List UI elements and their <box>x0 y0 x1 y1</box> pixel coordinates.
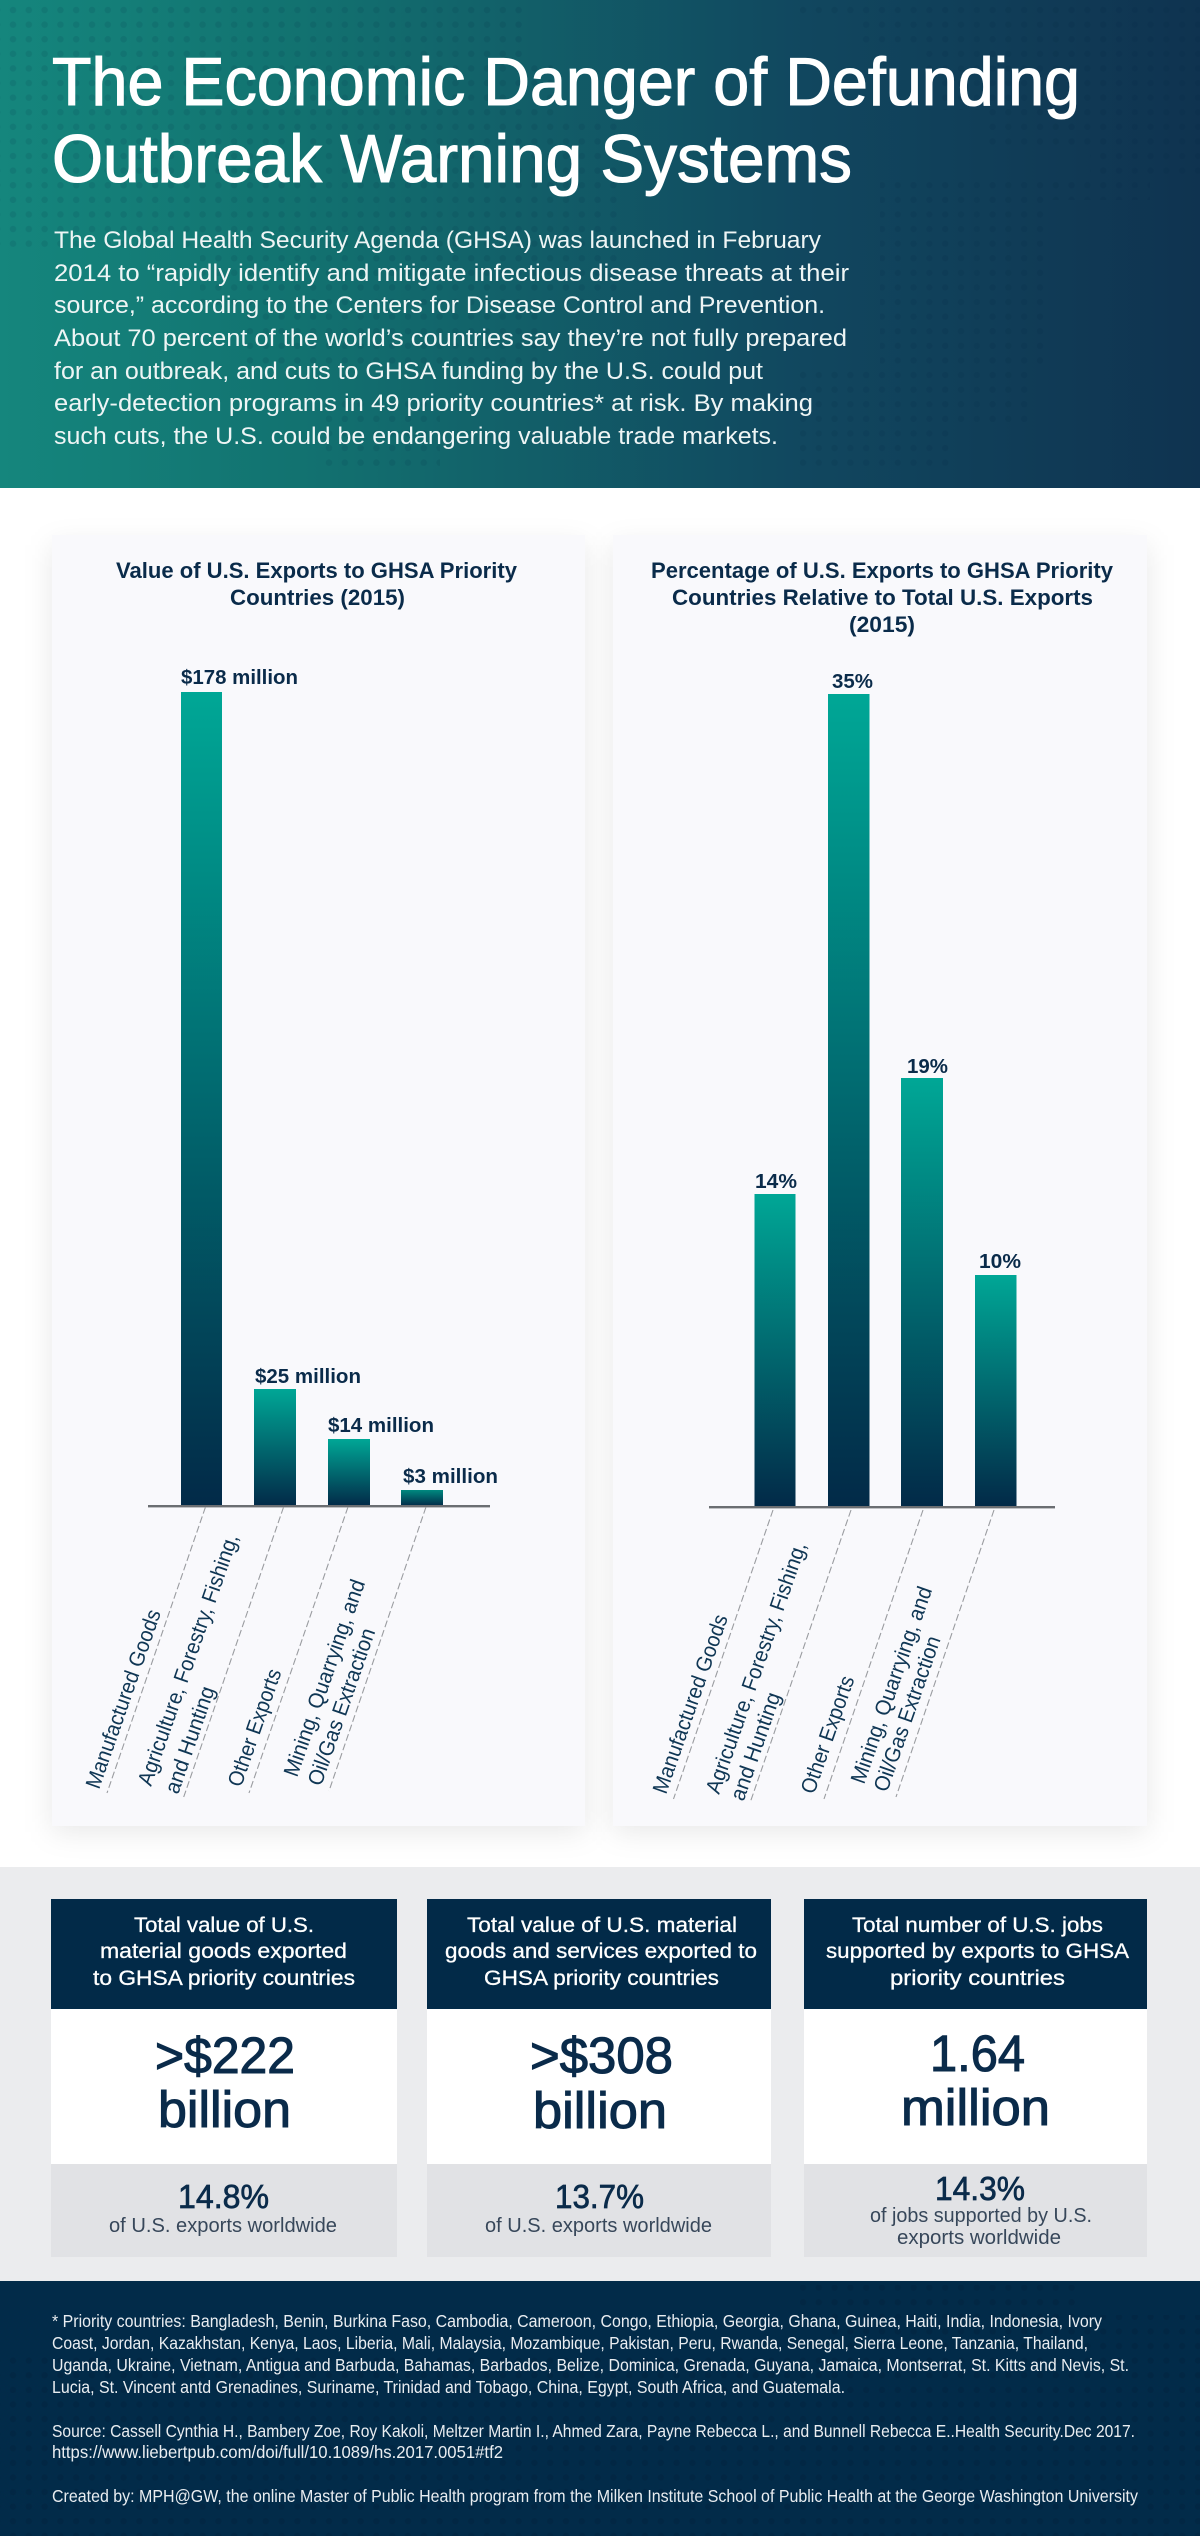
panel: percentage of exports <box>613 535 1147 1832</box>
big number: million <box>901 2079 1050 2136</box>
intro paragraph: The Global Health Security Agenda (GHSA) was launched in February <box>54 227 821 254</box>
card heading: Total number of U.S. jobs <box>852 1913 1103 1937</box>
category labels: Agriculture, Forestry, Fishing, <box>133 1531 243 1789</box>
bar: manufactured goods 14% <box>754 1170 797 1506</box>
bar: other exports 19% <box>901 1055 948 1506</box>
panel heading: (2015) <box>849 612 915 637</box>
card heading: goods and services exported to <box>445 1939 757 1963</box>
bar: mining 10% <box>975 1250 1021 1506</box>
big number: billion <box>158 2081 291 2138</box>
title: Outbreak Warning Systems <box>52 121 852 197</box>
share of jobs: 14.3% <box>935 2171 1025 2208</box>
category labels: Mining, Quarrying, and <box>279 1576 370 1780</box>
category leader lines <box>107 1507 426 1797</box>
bar: manufactured goods <box>181 666 298 1506</box>
intro paragraph: such cuts, the U.S. could be endangering valuable trade markets. <box>54 423 778 450</box>
card heading: Total value of U.S. <box>134 1913 314 1937</box>
bar: agriculture <box>254 1365 361 1506</box>
footnote: priority countries <box>52 2311 1129 2397</box>
intro paragraph: source,” according to the Centers for Disease Control and Prevention. <box>54 292 825 319</box>
share of exports <box>109 2179 337 2237</box>
bar: other exports: $14 million <box>328 1414 434 1437</box>
category labels: Other Exports <box>223 1666 286 1790</box>
category labels: Manufactured Goods <box>81 1606 166 1792</box>
card heading <box>445 1913 757 1990</box>
panel heading: Percentage of U.S. Exports to GHSA Priority <box>651 558 1113 583</box>
card heading: GHSA priority countries <box>484 1966 719 1990</box>
category labels: and Hunting <box>160 1683 220 1797</box>
share of exports: of U.S. exports worldwide <box>109 2215 337 2237</box>
bar: mining: $3 million <box>403 1465 498 1488</box>
category labels: Oil/Gas Extraction <box>869 1633 946 1795</box>
bar: agriculture 35% <box>828 670 873 1506</box>
stat card: material goods <box>51 1899 397 2257</box>
big number <box>901 2025 1050 2136</box>
stat card: goods and services <box>427 1899 771 2257</box>
share of exports <box>485 2179 712 2237</box>
category labels: Agriculture, Forestry, Fishing, <box>701 1539 811 1797</box>
bar: other exports <box>328 1414 434 1506</box>
intro paragraph: About 70 percent of the world’s countries say they’re not fully prepared <box>54 325 847 352</box>
panel heading <box>651 558 1113 637</box>
category leader lines <box>674 1510 994 1803</box>
share of jobs <box>870 2171 1092 2249</box>
intro paragraph: for an outbreak, and cuts to GHSA funding by the U.S. could put <box>54 358 763 385</box>
intro paragraph: 2014 to “rapidly identify and mitigate infectious disease threats at their <box>54 260 849 287</box>
panel heading: Countries (2015) <box>230 585 405 610</box>
bar: manufactured goods: $178 million <box>181 666 298 689</box>
category labels: Other Exports <box>796 1673 859 1797</box>
panel heading: Countries Relative to Total U.S. Exports <box>672 585 1093 610</box>
bar: agriculture 35%: 35% <box>832 670 873 693</box>
panel: value of exports <box>52 535 585 1832</box>
category labels: and Hunting <box>726 1689 786 1804</box>
bar: agriculture: $25 million <box>255 1365 361 1388</box>
footnote: source <box>52 2421 1135 2462</box>
category labels: Manufactured Goods <box>648 1611 733 1797</box>
card heading: to GHSA priority countries <box>93 1966 355 1990</box>
share of exports: 14.8% <box>178 2179 269 2216</box>
footnote: priority countries: Lucia, St. Vincent antd Grenadines, Suriname, Trinidad and Tobago, China, Egypt, South Africa, and Guatemala. <box>52 2377 845 2397</box>
share of jobs: exports worldwide <box>897 2227 1061 2249</box>
footnote: priority countries: Coast, Jordan, Kazakhstan, Kenya, Laos, Liberia, Mali, Malaysia, Mozambique, Pakistan, Peru, Rwanda, Senegal, Sierra Leone, Tanzania, Thailand, <box>52 2333 1088 2353</box>
share of exports: of U.S. exports worldwide <box>485 2215 712 2237</box>
category labels <box>648 1539 946 1804</box>
bar: mining 10%: 10% <box>979 1250 1021 1273</box>
panel heading <box>116 558 517 610</box>
big number: >$308 <box>530 2027 673 2084</box>
card heading: supported by exports to GHSA <box>826 1939 1130 1963</box>
bar: other exports 19%: 19% <box>907 1055 948 1078</box>
intro paragraph <box>54 227 849 450</box>
stat card: jobs <box>804 1899 1147 2257</box>
card heading: priority countries <box>890 1966 1065 1990</box>
card heading: material goods exported <box>100 1939 347 1963</box>
footnote: priority countries: * Priority countries: Bangladesh, Benin, Burkina Faso, Cambodia, Cameroon, Congo, Ethiopia, Georgia, Ghana, Guinea, Haiti, India, Indonesia, Ivory <box>52 2311 1102 2331</box>
card heading <box>826 1913 1130 1990</box>
x axis <box>148 1505 490 1507</box>
footnote: source: https://www.liebertpub.com/doi/full/10.1089/hs.2017.0051#tf2 <box>52 2442 503 2462</box>
category labels: Oil/Gas Extraction <box>303 1625 380 1789</box>
share of exports: 13.7% <box>555 2179 644 2216</box>
bar: manufactured goods 14%: 14% <box>755 1170 797 1193</box>
card heading <box>93 1913 355 1990</box>
category labels: Mining, Quarrying, and <box>846 1583 937 1787</box>
big number <box>530 2027 673 2139</box>
big number: 1.64 <box>930 2025 1025 2082</box>
share of jobs: of jobs supported by U.S. <box>870 2205 1092 2227</box>
x axis <box>709 1506 1055 1508</box>
card heading: Total value of U.S. material <box>467 1913 737 1937</box>
intro paragraph: early-detection programs in 49 priority countries* at risk. By making <box>54 390 813 417</box>
header band <box>0 0 1200 488</box>
footer band <box>0 2281 1200 2536</box>
big number: >$222 <box>155 2027 295 2084</box>
panel heading: Value of U.S. Exports to GHSA Priority <box>116 558 517 583</box>
big number: billion <box>533 2082 667 2139</box>
bar: mining <box>401 1465 498 1506</box>
big number <box>155 2027 295 2138</box>
title: The Economic Danger of Defunding <box>52 44 1080 120</box>
stats section background <box>0 1867 1200 2281</box>
category labels <box>81 1531 380 1797</box>
title <box>52 44 1080 197</box>
